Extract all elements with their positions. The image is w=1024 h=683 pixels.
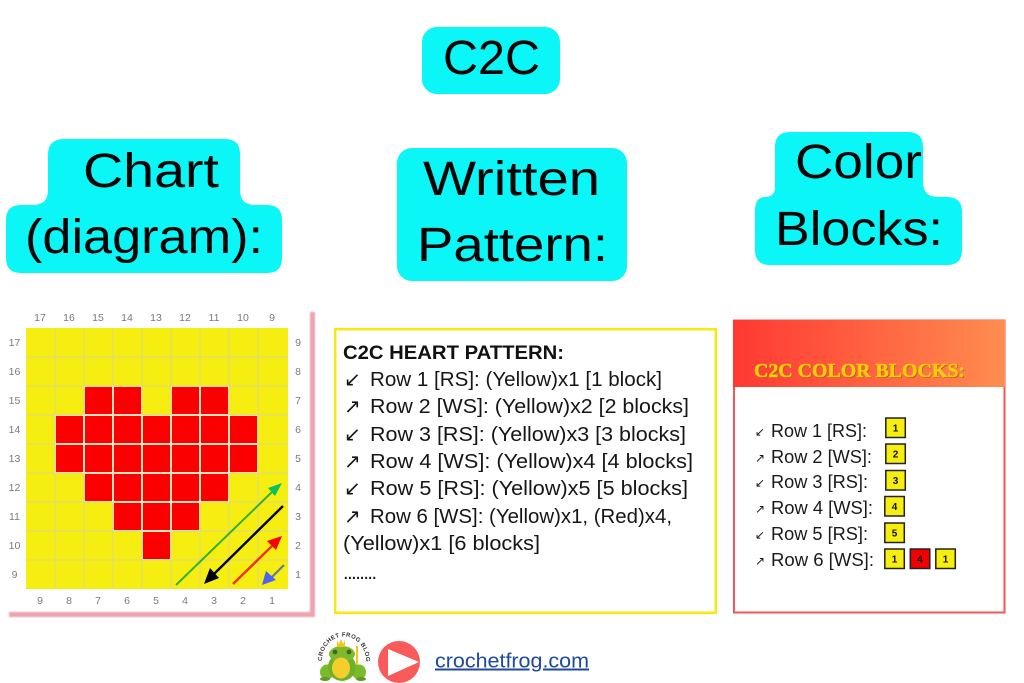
link: crochetfrog.com: crochetfrog.com	[435, 650, 589, 672]
top axis numbers: 12	[179, 312, 191, 324]
logo: crochet frog	[318, 632, 370, 681]
color row 3: Row 3 [RS]:	[771, 471, 868, 492]
frog staff	[356, 646, 358, 671]
color row 5: Row 5 [RS]:	[771, 523, 868, 544]
top axis numbers: 14	[121, 312, 133, 324]
heading: Chart (diagram): Chart	[83, 145, 219, 198]
pattern heading: C2C HEART PATTERN:	[343, 342, 564, 364]
frog crown	[337, 639, 345, 647]
color row 3: 3	[893, 476, 899, 487]
color blocks header: C2C COLOR BLOCKS:	[754, 360, 965, 382]
color row 6: 1	[943, 554, 949, 566]
frog legs	[320, 664, 334, 680]
color row 3: ↙	[755, 476, 765, 490]
heading: Written Pattern: Pattern:	[417, 219, 608, 272]
bottom axis numbers: 4	[182, 595, 188, 607]
pattern row 6: Row 6 [WS]: (Yellow)x1, (Red)x4,	[370, 506, 672, 528]
color row 1: Row 1 [RS]:	[771, 420, 867, 441]
pattern row 3: ↙	[344, 422, 361, 446]
heading: Chart (diagram)	[6, 139, 282, 273]
top axis numbers: 11	[209, 312, 220, 324]
color row 1	[755, 418, 905, 441]
color row 6: ↗	[755, 554, 765, 568]
title: C2C: C2C	[443, 32, 540, 85]
right axis numbers: 9	[295, 337, 301, 349]
heart cells	[56, 387, 257, 559]
chart yellow grid background	[26, 328, 288, 589]
pattern row 2: ↗	[344, 394, 361, 418]
left axis numbers	[9, 337, 20, 581]
color row 4	[755, 496, 904, 518]
right axis numbers: 2	[295, 540, 301, 552]
right axis numbers: 4	[295, 482, 301, 494]
frog belly	[332, 658, 350, 678]
bottom axis numbers: 5	[153, 595, 159, 607]
color row 6: 1	[892, 554, 898, 566]
chart shadow border	[9, 312, 315, 617]
left axis numbers: 9	[12, 569, 18, 581]
pattern ellipsis: ........	[343, 562, 377, 584]
pattern row 4: Row 4 [WS]: (Yellow)x4 [4 blocks]	[370, 451, 693, 473]
left axis numbers: 10	[9, 540, 20, 552]
top axis numbers: 10	[237, 312, 249, 324]
heading: Color Blocks: Color	[795, 136, 922, 189]
icon: play button	[378, 641, 420, 683]
color row 1: 1	[893, 424, 899, 434]
pattern row 3: Row 3 [RS]: (Yellow)x3 [3 blocks]	[370, 424, 686, 446]
heading: Chart (diagram): (diagram):	[25, 211, 263, 264]
color row 5: ↙	[755, 528, 765, 542]
frog body	[328, 653, 356, 681]
bottom axis numbers: 1	[269, 595, 275, 607]
bottom axis numbers: 2	[240, 595, 246, 607]
left axis numbers: 14	[9, 424, 20, 436]
right axis numbers: 6	[295, 424, 301, 436]
right axis numbers: 1	[295, 569, 301, 581]
color blocks header	[733, 320, 1005, 387]
bottom axis numbers	[37, 595, 275, 607]
top axis numbers: 9	[269, 312, 275, 324]
left axis numbers: 17	[9, 337, 20, 349]
right axis numbers: 3	[295, 511, 301, 523]
panel: heart chart	[9, 312, 315, 617]
pattern row 4: ↗	[344, 449, 361, 473]
left axis numbers: 16	[9, 366, 20, 378]
color row 6: 4	[917, 554, 923, 566]
heading: Color Blocks	[755, 132, 962, 265]
arrow: black row 3	[204, 506, 283, 584]
arrow: blue row 1	[262, 565, 284, 585]
color row 4: ↗	[755, 502, 765, 516]
color row 4: Row 4 [WS]:	[771, 497, 873, 518]
color row 5	[755, 523, 904, 544]
title: C2C	[422, 27, 560, 94]
color row 6	[755, 549, 955, 570]
heading: Written Pattern: Written	[423, 153, 600, 206]
color row 2: ↗	[755, 451, 765, 465]
color row 4: 4	[892, 502, 898, 513]
color blocks header: C2C COLOR BLOCKS:	[755, 361, 966, 383]
color row 1: ↙	[755, 425, 765, 439]
color row 3	[755, 470, 905, 492]
right axis numbers: 8	[295, 366, 301, 378]
heading: Color Blocks: Blocks:	[775, 203, 943, 256]
frog head	[329, 646, 355, 662]
top axis numbers: 17	[34, 312, 46, 324]
top axis numbers: 13	[150, 312, 162, 324]
bottom axis numbers: 6	[124, 595, 130, 607]
color row 2: 2	[893, 450, 899, 460]
bottom axis numbers: 7	[95, 595, 101, 607]
panel: color blocks	[733, 320, 1005, 612]
chart grid lines	[26, 328, 288, 589]
top axis numbers: 15	[92, 312, 104, 324]
color row 6: Row 6 [WS]:	[771, 549, 874, 570]
right axis numbers	[295, 337, 301, 581]
panel: written pattern	[335, 329, 716, 613]
bottom axis numbers: 3	[211, 595, 217, 607]
pattern row 6	[343, 504, 672, 555]
arrow: green row 4	[176, 483, 282, 585]
heading: Written Pattern	[397, 148, 627, 281]
top axis numbers	[34, 312, 275, 324]
right axis numbers: 7	[295, 395, 301, 407]
arrow: red row 2	[233, 536, 282, 584]
bottom axis numbers: 8	[66, 595, 72, 607]
left axis numbers: 13	[9, 453, 20, 465]
pattern row 1: Row 1 [RS]: (Yellow)x1 [1 block]	[370, 369, 662, 391]
color row 2	[755, 444, 905, 467]
pattern row 2: Row 2 [WS]: (Yellow)x2 [2 blocks]	[370, 396, 689, 418]
logo: crochet frog: CROCHET FROG BLOG	[318, 632, 370, 662]
pattern row 6: ↗	[344, 504, 361, 528]
pattern row 5: ↙	[344, 476, 361, 500]
pattern row 5: Row 5 [RS]: (Yellow)x5 [5 blocks]	[370, 478, 688, 500]
pattern row 6: (Yellow)x1 [6 blocks]	[343, 533, 540, 555]
pattern row 1: ↙	[344, 367, 361, 391]
left axis numbers: 15	[9, 395, 20, 407]
color row 2: Row 2 [WS]:	[771, 446, 872, 467]
top axis numbers: 16	[63, 312, 75, 324]
frog eyes	[333, 650, 337, 654]
left axis numbers: 12	[9, 482, 20, 494]
bottom axis numbers: 9	[37, 595, 43, 607]
color row 5: 5	[892, 528, 898, 540]
left axis numbers: 11	[9, 511, 20, 523]
right axis numbers: 5	[295, 453, 301, 465]
